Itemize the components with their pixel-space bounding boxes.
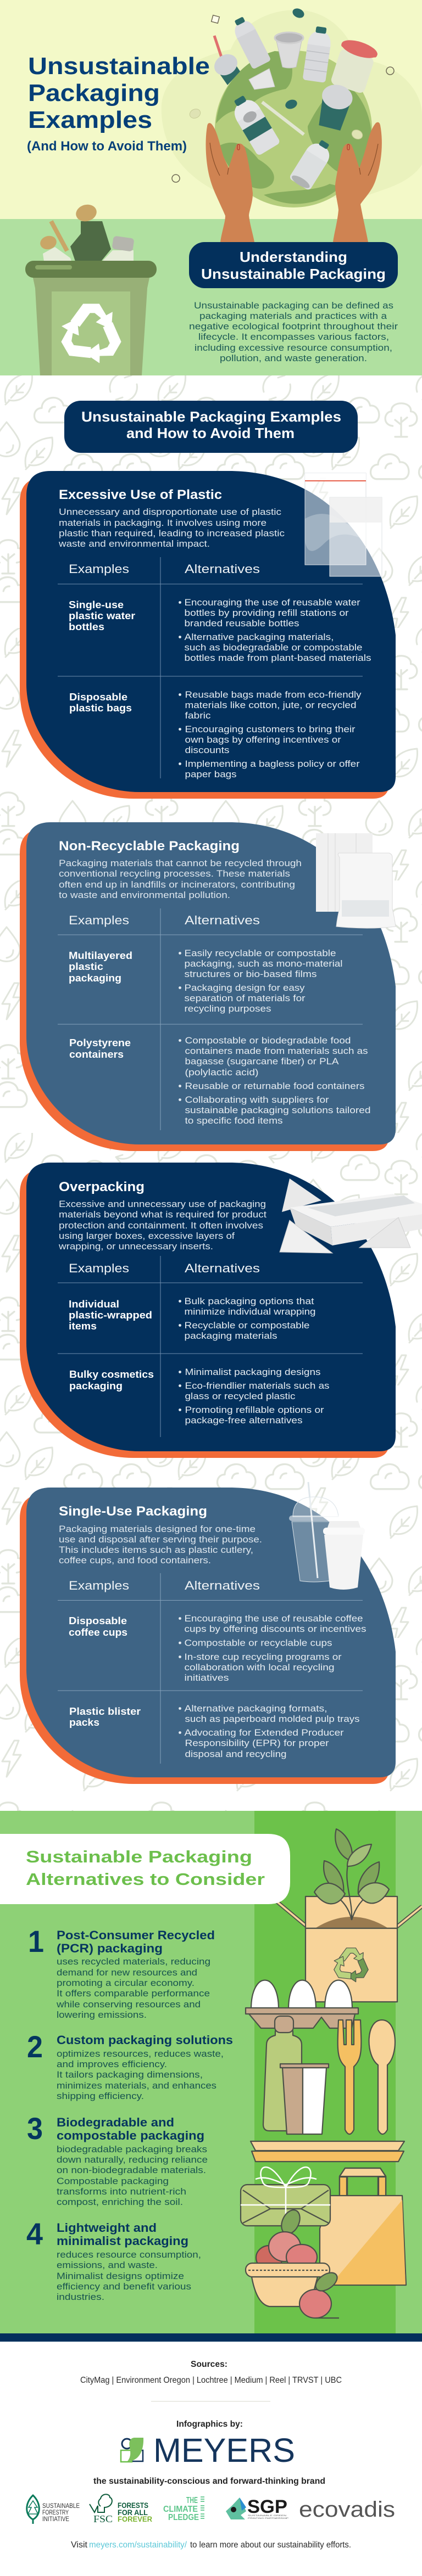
row: plastic blister packs: Responsibility (EPR) for proper [185,1738,329,1748]
logo: the climate pledge [163,2496,204,2522]
row: disposable plastic bags: materials like cotton, jute, or recycled [185,700,356,710]
table: examples and alternatives: Alternatives [185,562,260,576]
logo: sustainable forestry initiative: INITIATIVE [42,2516,69,2523]
item 1: post-consumer recycled packaging: while conserving resources and [56,1999,201,2010]
paper bag [320,2168,406,2285]
row: single-use plastic water bottles [69,597,371,663]
panel description [58,507,285,549]
eggs and carton [246,1980,358,2028]
row: polystyrene containers: Compostable or biodegradable food [185,1035,351,1046]
item 1: post-consumer recycled packaging: Post-Consumer Recycled [57,1928,215,1942]
item 4: lightweight and minimalist packaging: industries. [57,2292,104,2302]
table: examples and alternatives [58,1256,363,1437]
row: disposable coffee cups: cups by offering discounts or incentives [185,1624,366,1634]
row: multilayered plastic packaging: packaging [69,973,121,984]
logo: the climate pledge: PLEDGE [168,2513,199,2522]
spoon [369,2020,395,2134]
row: disposable plastic bags: Disposable [69,692,127,703]
table: examples and alternatives: Alternatives [185,1579,260,1592]
item 4: lightweight and minimalist packaging: efficiency and benefit various [57,2281,191,2292]
footer link line: to learn more about our sustainability efforts. [190,2540,351,2550]
section banner: and How to Avoid Them [126,425,295,441]
footer link line: meyers.com/sustainability/ [89,2540,187,2550]
item 1: post-consumer recycled packaging [28,1924,215,2020]
panel description [59,858,302,900]
row: bulky cosmetics packaging: Promoting refillable options or [185,1405,324,1415]
title [27,53,210,154]
row: multilayered plastic packaging: recycling purposes [185,1003,271,1014]
row: multilayered plastic packaging: Easily recyclable or compostable [185,948,336,958]
green bottle [263,2016,302,2131]
item 3: biodegradable and compostable packaging: down naturally, reducing reliance [57,2154,208,2165]
row: polystyrene containers: (polylactic acid) [185,1067,258,1077]
header band [0,0,422,375]
item 4: lightweight and minimalist packaging: emissions, and waste. [57,2260,158,2270]
panel description: protection and containment. It often involves [59,1220,263,1231]
row: plastic blister packs: packs [69,1717,99,1728]
item 3: biodegradable and compostable packaging: compost, enriching the soil. [57,2197,183,2207]
grey cup [275,32,303,68]
heading: sustainable packaging alternatives: Alternatives to Consider [26,1870,265,1889]
panel description: materials in packaging. It involves using more [59,518,266,528]
panel description: coffee cups, and food containers. [59,1555,211,1565]
row: multilayered plastic packaging: plastic [69,961,103,972]
item 2: custom packaging solutions: optimizes resources, reduces waste, [57,2049,224,2059]
row: polystyrene containers: containers made from materials such as [185,1046,368,1056]
logo: FSC forests for all forever [90,2494,152,2524]
title: Packaging [28,80,160,106]
globe [215,50,372,207]
panel description: waste and environmental impact. [58,538,210,549]
illustration: sustainable packaging products [241,1829,422,2318]
row: multilayered plastic packaging: Multilayered [69,950,132,961]
text block: definition: lifecycle. It encompasses various factors, [198,332,389,342]
logo: the climate pledge: THE [186,2496,198,2505]
row: disposable coffee cups: initiatives [185,1673,229,1683]
row: multilayered plastic packaging [69,948,343,1014]
logo: sustainable green printing partnership: SGP [247,2496,287,2517]
panel description: Unnecessary and disproportionate use of plastic [59,507,282,517]
panel description: often end up in landfills or incinerators, contributing [59,879,295,890]
jar with red lid [329,37,380,94]
panel heading: Excessive Use of Plastic [59,487,222,502]
table: examples and alternatives: Examples [69,1579,129,1592]
illustration: globe with plastic waste held by hands [162,7,422,242]
row: disposable coffee cups: Disposable [69,1615,127,1626]
item 1: post-consumer recycled packaging: lowering emissions. [57,2010,147,2020]
row: multilayered plastic packaging: Packaging design for easy [185,983,305,993]
text block: definition: including excessive resource consumption, [195,343,392,353]
item 2: custom packaging solutions: shipping efficiency. [57,2091,144,2101]
credit: infographics by Meyers: the sustainability-conscious and forward-thinking brand [93,2477,325,2486]
plates [251,2141,404,2162]
panel description: conventional recycling processes. These materials [59,868,290,879]
section: sustainable packaging alternatives background [0,1811,422,2342]
icon: white recycling arrows [54,304,127,367]
panel description: materials beyond what is required for product [59,1209,266,1220]
section banner [64,401,358,453]
row: bulky cosmetics packaging: packaging [69,1380,123,1391]
table: examples and alternatives [58,908,370,1130]
row: individual plastic-wrapped items: plastic-wrapped [69,1310,152,1321]
sources: Sources: [191,2360,227,2369]
row: multilayered plastic packaging: packaging, such as mono-material [185,958,343,969]
loose straw [262,102,304,134]
item 1: post-consumer recycled packaging: 1 [28,1924,44,1958]
row: polystyrene containers: Collaborating with suppliers for [185,1095,329,1105]
row: polystyrene containers: bagasse (sugarcane fiber) or PLA [185,1056,339,1067]
item 3: biodegradable and compostable packaging: on non-biodegradable materials. [57,2165,206,2175]
icon: plastic zip bags [305,473,382,576]
title: (And How to Avoid Them) [27,139,187,154]
row: individual plastic-wrapped items: minimize individual wrapping [185,1306,315,1317]
item 3: biodegradable and compostable packaging: compostable packaging [57,2129,204,2142]
cup [280,2064,329,2134]
logo: sustainable forestry initiative: FORESTRY [42,2510,69,2516]
row: disposable plastic bags: fabric [185,710,211,721]
item 3: biodegradable and compostable packaging: transforms into nutrient-rich [57,2186,186,2197]
logo: the climate pledge: CLIMATE [163,2505,198,2514]
row: individual plastic-wrapped items: Bulk packaging options that [185,1296,314,1306]
row: single-use plastic water bottles: Single-use [69,599,124,610]
row: single-use plastic water bottles: such as biodegradable or compostable [185,642,363,653]
logo: sustainable forestry initiative: SUSTAINABLE [42,2503,80,2510]
item 1: post-consumer recycled packaging: It offers comparable performance [57,1988,210,1999]
row: polystyrene containers [69,1035,370,1126]
row: plastic blister packs [69,1703,359,1759]
row: disposable plastic bags: plastic bags [69,703,132,714]
panel heading: Non-Recyclable Packaging [59,839,240,854]
row: polystyrene containers: to specific food items [185,1115,282,1126]
logo: FSC forests for all forever: FOR ALL [118,2508,148,2517]
panel description: Packaging materials that cannot be recycled through [59,858,302,868]
row: bulky cosmetics packaging: Eco-friendlier materials such as [185,1380,330,1391]
row: bulky cosmetics packaging: glass or recycled plastic [185,1391,296,1401]
row: plastic blister packs: Plastic blister [69,1706,141,1717]
footer link line [71,2540,351,2550]
panel heading: Single-Use Packaging [59,1504,207,1519]
row: disposable plastic bags: Reusable bags made from eco-friendly [185,689,362,700]
panel description: Excessive and unnecessary use of packaging [59,1199,266,1209]
row: disposable coffee cups: In-store cup recycling programs or [185,1652,342,1662]
row: polystyrene containers: Polystyrene [69,1037,131,1048]
row: bulky cosmetics packaging: Bulky cosmetics [69,1369,154,1380]
panel description: plastic than required, leading to increased plastic [59,528,285,538]
item 2: custom packaging solutions: Custom packaging solutions [57,2033,233,2047]
title: Examples [28,106,152,133]
item 1: post-consumer recycled packaging: uses recycled materials, reducing [57,1956,210,1967]
lidded cup with straw [210,36,241,85]
row: multilayered plastic packaging: separation of materials for [185,993,306,1003]
credit: infographics by Meyers: Infographics by: [176,2420,243,2429]
table: examples and alternatives: Examples [69,562,129,576]
item 1: post-consumer recycled packaging: promoting a circular economy. [57,1978,195,1988]
row: single-use plastic water bottles: branded reusable bottles [185,618,299,628]
icon: plastic and paper cups [289,1482,365,1590]
text block: definition: packaging materials and practices with a [199,311,387,321]
text block: definition: Unsustainable packaging can be defined as [194,301,393,311]
heading: understanding unsustainable packaging [189,242,398,288]
sources: CityMag | Environment Oregon | Lochtree | Medium | Reel | TRVST | UBC [80,2376,342,2385]
row: multilayered plastic packaging: structures or bio-based films [185,969,316,979]
row: single-use plastic water bottles: Alternative packaging materials, [185,632,334,642]
credit: infographics by Meyers [93,2420,325,2486]
box with plant [272,1829,422,2002]
item 3: biodegradable and compostable packaging: Biodegradable and [57,2115,174,2129]
icon: overpacked boxes and wraps [280,1178,422,1253]
row: plastic blister packs: Alternative packaging formats, [185,1703,327,1714]
table: examples and alternatives: Examples [69,1261,129,1275]
logo: sustainable green printing partnership: PRINTING PARTNERSHIP [248,2517,288,2519]
title: Unsustainable [28,53,210,80]
heading: understanding unsustainable packaging: Understanding [240,249,347,265]
row: bulky cosmetics packaging [69,1367,330,1426]
row: individual plastic-wrapped items: items [69,1321,97,1332]
row: single-use plastic water bottles: bottles by providing refill stations or [185,608,349,618]
row: individual plastic-wrapped items: Individual [69,1299,119,1310]
row: single-use plastic water bottles: bottles made from plant-based materials [185,653,371,663]
logo: sustainable green printing partnership [226,2496,288,2519]
row: individual plastic-wrapped items [69,1296,315,1341]
row: disposable coffee cups: collaboration with local recycling [185,1662,334,1673]
item 4: lightweight and minimalist packaging: Minimalist designs optimize [57,2271,184,2281]
item 1: post-consumer recycled packaging: (PCR) packaging [57,1941,163,1955]
icon: recycling arrows on box [330,1948,372,1984]
logo: FSC forests for all forever: FOREVER [118,2515,152,2523]
logo: Meyers icon [121,2438,143,2462]
row: individual plastic-wrapped items: packaging materials [185,1331,277,1341]
logo: ecovadis: ecovadis [299,2498,395,2522]
icon: white pouches [316,833,396,928]
text block: definition: negative ecological footprint throughout their [189,322,398,332]
table: examples and alternatives [58,1573,366,1764]
logo: sustainable forestry initiative [27,2495,80,2524]
panel description [59,1524,262,1565]
item 3: biodegradable and compostable packaging [27,2111,208,2207]
logo: FSC forests for all forever: FSC [93,2513,113,2524]
fork [338,2020,361,2134]
text block: definition: pollution, and waste generation. [220,353,367,363]
item 4: lightweight and minimalist packaging: Lightweight and [57,2221,157,2235]
right hand [333,122,382,242]
row: plastic blister packs: disposal and recycling [185,1749,287,1759]
heading: sustainable packaging alternatives [0,1834,290,1904]
centre bottle with teal label [227,91,281,156]
panel heading: Overpacking [59,1180,145,1194]
small outline shapes [172,15,394,182]
section banner: Unsustainable Packaging Examples [81,408,341,425]
footer link line: Visit [71,2540,88,2550]
table: examples and alternatives [58,557,371,779]
panel description: This includes items such as plastic cutlery, [59,1545,253,1555]
panel: non-recyclable packaging [20,822,396,1151]
top left bottle [230,14,271,70]
row: plastic blister packs: such as paperboard molded pulp trays [185,1714,359,1724]
teal cup with dome lid [315,82,355,132]
row: individual plastic-wrapped items: Recyclable or compostable [185,1320,310,1331]
sources [80,2360,342,2402]
row: disposable plastic bags: Implementing a bagless policy or offer [185,759,360,769]
row: disposable plastic bags: Encouraging customers to bring their [185,724,356,734]
icon: recycling bin with bottles [25,203,157,375]
apples and bowl [246,2232,340,2318]
row: bulky cosmetics packaging: Minimalist packaging designs [185,1367,321,1377]
item 4: lightweight and minimalist packaging [26,2216,201,2302]
row: disposable coffee cups [69,1613,366,1683]
item 4: lightweight and minimalist packaging: reduces resource consumption, [57,2249,201,2260]
panel description: Packaging materials designed for one-time [59,1524,256,1534]
top centre bottle [303,25,333,83]
item 1: post-consumer recycled packaging: demand for new resources and [57,1967,197,1978]
row: polystyrene containers: Reusable or returnable food containers [185,1081,365,1091]
item 4: lightweight and minimalist packaging: 4 [26,2216,43,2251]
heading: understanding unsustainable packaging: Unsustainable Packaging [201,266,386,282]
row: disposable coffee cups: coffee cups [69,1627,127,1638]
logo: sustainable green printing partnership: SUSTAINABLE GREEN [248,2514,286,2517]
item 3: biodegradable and compostable packaging: Compostable packaging [57,2176,169,2186]
item 2: custom packaging solutions: minimizes materials, and enhances [57,2080,216,2091]
logo: FSC forests for all forever: FORESTS [118,2501,148,2510]
translucent bottle [288,136,336,192]
row: disposable plastic bags [69,689,362,779]
text block: definition [189,301,398,363]
item 3: biodegradable and compostable packaging: biodegradable packaging breaks [57,2144,207,2154]
plant [314,1829,389,1920]
row: disposable plastic bags: paper bags [185,769,236,779]
row: single-use plastic water bottles: plastic water [69,610,135,621]
item 2: custom packaging solutions: and improves efficiency. [57,2059,167,2069]
row: polystyrene containers: sustainable packaging solutions tailored [185,1105,370,1115]
left hand [206,123,254,242]
row: disposable coffee cups: Encouraging the use of reusable coffee [185,1613,363,1624]
row: single-use plastic water bottles: bottles [69,621,104,632]
row: single-use plastic water bottles: Encouraging the use of reusable water [185,597,360,608]
row: polystyrene containers: containers [69,1049,124,1060]
table: examples and alternatives: Examples [69,913,129,927]
panel description: to waste and environmental pollution. [59,890,230,900]
table: examples and alternatives: Alternatives [185,913,260,927]
panel description: wrapping, or unnecessary inserts. [58,1241,213,1251]
white cup on globe [249,69,275,89]
item 2: custom packaging solutions: 2 [27,2029,43,2064]
panel description: use and disposal after serving their purpose. [59,1534,262,1545]
panel: single-use packaging [20,1482,396,1784]
credit: infographics by Meyers: MEYERS [153,2432,295,2469]
row: disposable plastic bags: discounts [185,745,230,755]
bin contents [38,203,134,261]
table: examples and alternatives: Alternatives [185,1261,260,1275]
item 3: biodegradable and compostable packaging: 3 [27,2111,43,2146]
item 4: lightweight and minimalist packaging: minimalist packaging [57,2234,188,2248]
wrapped gift with ribbon [241,2167,330,2237]
row: disposable coffee cups: Compostable or recyclable cups [185,1638,332,1648]
heading: sustainable packaging alternatives: Sustainable Packaging [26,1847,252,1866]
item 2: custom packaging solutions [27,2029,233,2101]
panel: overpacking [20,1163,422,1458]
item 2: custom packaging solutions: It tailors packaging dimensions, [57,2069,203,2080]
loose caps [188,7,364,141]
panel: excessive use of plastic [20,471,396,799]
panel description: using larger boxes, excessive layers of [59,1231,235,1241]
row: bulky cosmetics packaging: package-free alternatives [185,1415,302,1426]
row: plastic blister packs: Advocating for Extended Producer [185,1727,344,1738]
row: disposable plastic bags: own bags by offering incentives or [185,734,341,745]
panel description [58,1199,266,1251]
